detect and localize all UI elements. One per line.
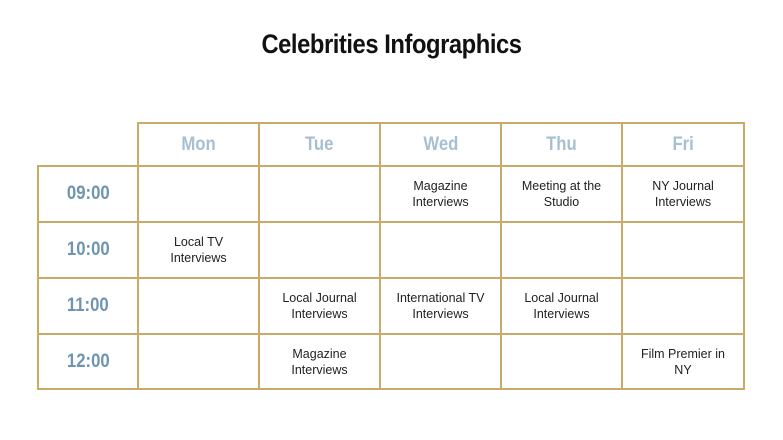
header: days [137,122,745,165]
schedule table: Interviews [533,307,590,321]
schedule table: NY [674,362,692,376]
schedule table: Interviews [412,195,469,209]
schedule table: Interviews [291,362,348,376]
schedule table: Local Journal [282,291,357,305]
schedule table: International TV [396,291,485,305]
schedule table: 10:00 [67,239,109,260]
schedule table: Interviews [412,307,469,321]
schedule table: Wed [423,134,458,154]
schedule table: Tue [305,134,334,154]
schedule table: 12:00 [67,350,109,372]
schedule table: Interviews [170,251,227,265]
time column [37,165,137,390]
body cells [139,167,745,390]
schedule table: Studio [544,195,579,209]
title: Celebrities Infographics [261,29,522,59]
schedule table: Mon [181,134,216,154]
schedule table: 09:00 [67,183,109,204]
schedule table: Film Premier in [641,346,725,360]
schedule table: Interviews [291,307,348,321]
schedule table: NY Journal [652,179,714,193]
schedule table: Magazine [413,179,468,193]
schedule table: Fri [672,134,694,154]
schedule table: Thu [546,134,577,154]
schedule table: Meeting at the [522,179,601,193]
schedule table: Local TV [174,235,223,249]
schedule table: 11:00 [67,295,109,316]
schedule table: Magazine [292,346,347,360]
schedule table: Local Journal [524,291,599,305]
schedule table: Interviews [655,195,711,209]
